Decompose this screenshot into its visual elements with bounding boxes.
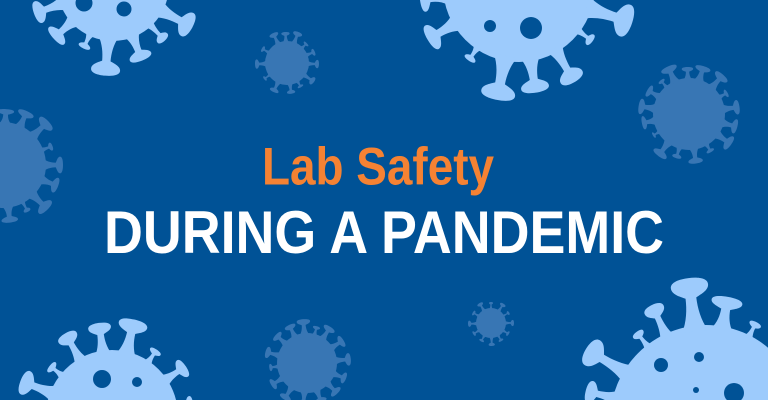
icon: virus top centre bbox=[418, 0, 637, 103]
icon: virus top left bbox=[30, 0, 199, 77]
icon: faded virus bottom middle bbox=[264, 319, 351, 400]
title: During a Pandemic: DURING A PANDEMIC bbox=[104, 199, 664, 266]
icon: faded small virus bottom bbox=[468, 302, 514, 346]
icon: faded virus right bbox=[637, 63, 741, 165]
icon: virus bottom right bbox=[578, 276, 768, 400]
icon: faded virus top middle bbox=[255, 30, 319, 94]
icon: virus bottom left bbox=[16, 316, 194, 400]
title: Lab Safety: Lab Safety bbox=[262, 138, 494, 196]
icon: faded virus left bbox=[0, 108, 63, 224]
